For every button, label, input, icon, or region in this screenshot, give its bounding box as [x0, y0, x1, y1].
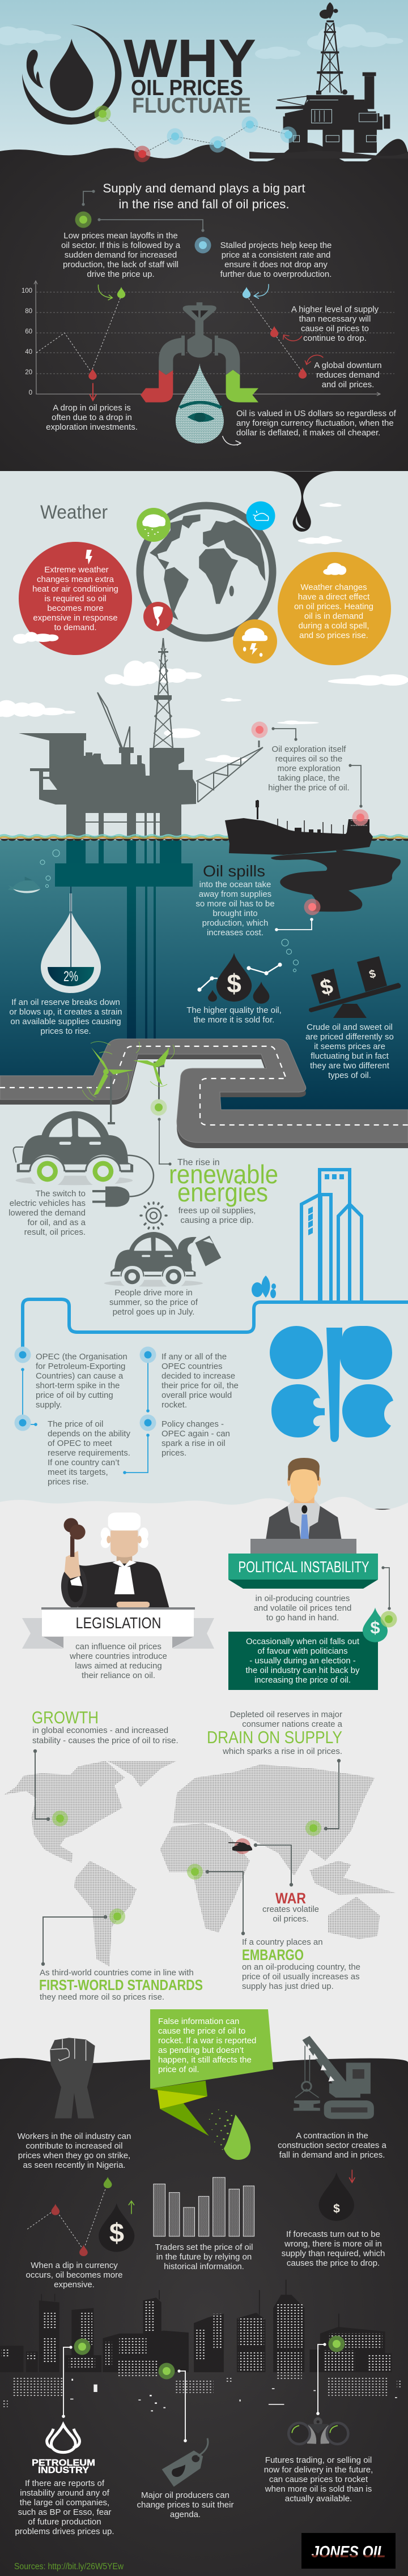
platform cut-outs — [43, 772, 160, 836]
text: OPEC 3: prices rise. — [48, 1477, 89, 1487]
scale with barrels — [309, 956, 401, 1018]
text: forecasts: If forecasts turn out to be — [286, 2230, 380, 2239]
text: petroleum: such as BP or Esso, fear — [18, 2507, 111, 2517]
callout: false information: price of oil. — [158, 2065, 199, 2074]
text: OPEC 1: OPEC (the Organisation — [36, 1352, 128, 1362]
heading: drain on supply — [207, 1710, 343, 1756]
heading: drain on supply: consumer nations create a — [242, 1719, 343, 1729]
text: reserve: on available supplies causing — [10, 1017, 121, 1026]
hatched bar chart — [154, 2177, 254, 2236]
bubbles — [40, 850, 298, 972]
icon: petroleum drops — [47, 2425, 80, 2453]
text: OPEC 2: their price for oil, the — [162, 1381, 239, 1390]
underwater pillars — [55, 840, 193, 1042]
marker: tanker — [352, 810, 368, 825]
chart: axes and grid: 80 — [25, 308, 32, 315]
text: first-world standards: As third-world countries come in line with — [40, 1968, 194, 1978]
reserve drop 2% — [41, 887, 101, 993]
quality oil drops with dollar: $ — [227, 969, 241, 998]
panel: politicians — [228, 1632, 378, 1690]
chart: axes and grid — [22, 281, 394, 396]
text: first-world standards — [39, 1968, 203, 2002]
text: oil spills: increases cost. — [207, 928, 264, 938]
chart: axes and grid: 20 — [25, 369, 32, 376]
marker and connector: futures — [316, 2336, 345, 2415]
weather icon: tornado — [143, 602, 173, 631]
chart: axes and grid: 60 — [25, 328, 32, 335]
chart: drops — [88, 287, 307, 380]
podium — [250, 1539, 356, 1554]
text: construction: construction sector creates a — [278, 2141, 387, 2150]
heading: renewable energies: causing a price dip. — [180, 1216, 254, 1225]
text: oil spills: so more oil has to be — [196, 899, 275, 909]
chart: axes and grid: 100 — [22, 288, 32, 294]
callout: false information: happen, it still affects the — [158, 2055, 252, 2065]
text: low prices: Low prices mean layoffs in the — [63, 231, 178, 241]
text: crude and sweet: Crude oil and sweet oil — [307, 1022, 393, 1032]
text: futures: now for delivery in the future, — [264, 2465, 373, 2475]
text: legislation: their reliance on oil. — [82, 1671, 155, 1680]
connector: political — [381, 1566, 391, 1610]
panel: politicians: the oil industry can hit back by — [246, 1666, 360, 1675]
text: higher supply: A higher level of supply — [291, 305, 379, 314]
text: traders: historical information. — [164, 2262, 244, 2271]
text: global downturn: A global downturn — [314, 361, 382, 370]
text: reserve: or blows up, it creates a strain — [9, 1007, 122, 1017]
text: currency: occurs, oil becomes more — [26, 2270, 122, 2280]
panel: extreme weather: heat or air conditioning — [32, 584, 118, 594]
text: OPEC 2: overall price would — [162, 1390, 232, 1400]
icon: price tag — [162, 2438, 208, 2487]
fish — [8, 876, 40, 893]
text: exploration: requires oil so the — [275, 754, 342, 764]
clouds in sky — [0, 24, 403, 59]
text: higher quality: The higher quality the oil, — [186, 1005, 282, 1015]
text: OPEC 4: Policy changes - — [162, 1419, 224, 1429]
connector: exploration — [271, 727, 363, 808]
text: war — [262, 1890, 319, 1924]
text: low prices: production, the lack of staff will — [63, 260, 178, 269]
heading: weather: Weather — [40, 502, 108, 523]
text: workers: Workers in the oil industry can — [18, 2132, 131, 2141]
text: OPEC 1: short-term spike in the — [36, 1381, 120, 1390]
clouds white in weather — [298, 503, 342, 544]
text: workers: contribute to increased oil — [26, 2141, 122, 2151]
text: electric vehicles: The switch to — [36, 1189, 86, 1199]
callout: false information: as pending but doesn’t — [158, 2046, 244, 2055]
text: OPEC 1: for Petroleum-Exporting — [36, 1362, 125, 1371]
panel: extreme weather: is required so oil — [44, 594, 107, 604]
chart: axes and grid: 40 — [25, 349, 32, 356]
text: electric vehicles: for oil, and as a — [27, 1218, 86, 1227]
logo: jones oil — [301, 2533, 396, 2569]
OPEC markers and links — [15, 1346, 156, 1474]
chart: curved arrows — [90, 284, 323, 446]
panel: weather changes — [278, 552, 391, 665]
quality oil drops with dollar — [197, 953, 282, 1004]
ribbon: legislation — [22, 1607, 214, 1649]
connector: renewable — [158, 1118, 172, 1166]
text: OPEC 3: The price of oil — [48, 1419, 103, 1429]
panel: weather changes: have a direct effect — [298, 592, 370, 602]
dollar sign: forecast: $ — [333, 2202, 340, 2215]
logo: jones oil: JONES OIL — [312, 2543, 385, 2561]
sea surface wave — [0, 834, 408, 842]
text: war: creates volatile — [262, 1905, 319, 1914]
heading: renewable energies — [169, 1158, 278, 1225]
text: currency: expensive. — [54, 2280, 95, 2290]
weather icon: snow cloud — [137, 508, 171, 542]
marker: spill — [304, 899, 321, 915]
text: oil producing: and volatile oil prices tend — [254, 1603, 351, 1613]
panel: extreme weather: Extreme weather — [44, 565, 109, 575]
text: oil spills: brought into — [212, 909, 258, 918]
text: OPEC 3: If one country can’t — [48, 1458, 120, 1467]
text: embargo: EMBARGO — [242, 1946, 304, 1963]
heading: petroleum industry — [32, 2458, 95, 2475]
text: exploration: higher the price of oil. — [268, 783, 350, 793]
city skyline — [0, 2280, 392, 2372]
reserve drop 2%: 2% — [63, 969, 78, 985]
text: drop in oil prices: often due to a drop in — [52, 413, 132, 422]
text: crude and sweet: fluctuating but in fact — [311, 1051, 389, 1061]
oil spill — [271, 849, 401, 912]
scale with barrels: $ — [318, 974, 335, 1000]
text: higher supply: cause oil prices to — [301, 324, 369, 333]
text: exploration: more exploration — [277, 764, 341, 773]
text: oil valued in dollars: any foreign currency fluctuation, when the — [236, 418, 394, 428]
text: electric vehicles: lowered the demand — [8, 1208, 86, 1218]
logo: oil drop in crescent — [22, 24, 121, 125]
currency dip chart — [27, 2177, 134, 2256]
heading: growth: GROWTH — [32, 1708, 99, 1727]
icon: binoculars — [288, 2417, 348, 2444]
text: oil spills: away from supplies — [199, 889, 271, 899]
text: construction: A contraction in the — [296, 2131, 368, 2141]
oil tanker — [225, 800, 373, 855]
text: higher supply: than necessary will — [299, 314, 371, 324]
text: legislation: can influence oil prices — [75, 1642, 162, 1651]
heading: renewable energies: The rise in — [177, 1158, 220, 1167]
callout: false information: cause the price of oil to — [158, 2026, 245, 2036]
city lights fading — [3, 2372, 402, 2407]
dollar sign: currency: $ — [109, 2218, 124, 2248]
ribbon: legislation: LEGISLATION — [76, 1614, 161, 1632]
callout: false information: False information can — [158, 2017, 239, 2026]
heading: renewable energies: frees up oil supplies, — [178, 1206, 256, 1216]
text: exploration: taking place, the — [278, 773, 340, 783]
text: higher quality: the more it is sold for. — [194, 1015, 274, 1025]
panel: politicians: increasing the price of oil. — [254, 1675, 351, 1685]
text: low prices: drive the price up. — [87, 269, 155, 279]
text: crude and sweet: types of oil. — [328, 1071, 371, 1080]
dollar drop with eye — [176, 363, 224, 443]
background: light section — [0, 467, 408, 1509]
text: petroleum: the large oil companies, — [20, 2498, 109, 2507]
text: currency: When a dip in currency — [31, 2261, 118, 2270]
oil platform — [19, 638, 263, 838]
text: petroleum: If there are reports of — [25, 2479, 105, 2488]
panel: extreme weather: becomes more — [47, 604, 104, 613]
text: electric vehicles: electric vehicles has — [10, 1199, 86, 1208]
text: low prices: sudden demand for increased — [65, 250, 177, 260]
heading: petroleum industry: INDUSTRY — [38, 2466, 89, 2475]
heading: drain on supply: DRAIN ON SUPPLY — [207, 1727, 342, 1747]
chart: axes and grid: 0 — [29, 390, 32, 396]
heading: growth: in global economies - and increased — [32, 1726, 168, 1735]
text: war: oil prices. — [273, 1914, 309, 1924]
text: embargo: on an oil-producing country, the — [242, 1962, 360, 1972]
text: drop in oil prices: exploration investments. — [46, 422, 138, 432]
forecast drop — [319, 2170, 355, 2221]
text: crude and sweet: are priced differently so — [305, 1032, 394, 1042]
marker and connector: petroleum — [62, 2338, 91, 2418]
car with petrol can — [104, 1232, 221, 1289]
background: water — [0, 840, 408, 1115]
clouds around rig — [0, 661, 408, 763]
heading: petroleum industry: PETROLEUM — [32, 2458, 95, 2468]
icon: tank — [228, 1842, 252, 1851]
text: oil valued in dollars: dollar is deflated, it makes oil cheaper. — [236, 428, 380, 438]
heading: oil spills: Oil spills — [203, 862, 265, 880]
text: low prices: oil sector. If this is followed by a — [61, 241, 181, 250]
panel: weather changes: during a cold spell, — [298, 621, 369, 631]
title: OIL PRICES — [131, 76, 243, 100]
city outline blue — [23, 1170, 408, 1355]
panel: extreme weather — [19, 542, 132, 655]
heading: growth — [32, 1708, 178, 1745]
text: electric vehicles: result, oil prices. — [24, 1227, 86, 1237]
text: OPEC 1: Countries) can cause a — [36, 1371, 124, 1381]
background: grey section — [0, 1497, 408, 2095]
text: major producers: change prices to suit their — [137, 2500, 233, 2510]
city scattered lights — [70, 2379, 397, 2411]
text: OPEC 2: decided to increase — [162, 1371, 235, 1381]
marker: renewable — [151, 1099, 167, 1115]
text: OPEC 2: rocket. — [162, 1400, 187, 1410]
politician — [266, 1458, 341, 1539]
text: major producers: Major oil producers can — [141, 2491, 230, 2500]
panel: extreme weather: changes mean extra — [37, 575, 114, 584]
text: OPEC 2: OPEC countries — [162, 1362, 223, 1371]
text: forecasts: wrong, there is more oil in — [284, 2239, 382, 2249]
panel: politicians: - usually during an election - — [249, 1656, 356, 1666]
text: war: WAR — [275, 1890, 306, 1907]
dotted world map — [4, 1761, 396, 1966]
sources: Sources: http://bit.ly/26W5YEw — [14, 2562, 124, 2571]
marker: green intro — [75, 212, 92, 228]
text: petroleum: instability around any of — [20, 2488, 110, 2498]
text: workers: prices when they go on strike, — [18, 2151, 130, 2160]
map markers — [52, 1811, 321, 1924]
panel: politicians: of favour with politicians — [257, 1646, 348, 1656]
text: OPEC 3: meet its targets, — [48, 1467, 108, 1477]
marker: blue intro — [195, 237, 211, 254]
callout: false information: rocket. If a war is reported — [158, 2036, 256, 2046]
text: OPEC 2: If any or all of the — [162, 1352, 227, 1362]
text: first-world standards: FIRST-WORLD STANDARDS — [39, 1976, 203, 1993]
wave over rig legs — [249, 151, 408, 159]
text: people drive: summer, so the price of — [109, 1298, 198, 1307]
scale with barrels: $ — [368, 968, 377, 981]
wind turbines — [82, 1042, 175, 1124]
heading: drain on supply: which sparks a rise in oil prices. — [222, 1747, 342, 1756]
map connectors — [33, 1749, 341, 1966]
weather icon: storm cloud — [233, 619, 277, 664]
intro text: in the rise and fall of oil prices. — [118, 197, 290, 211]
text: people drive: People drive more in — [114, 1288, 193, 1298]
text: workers: as seen recently in Nigeria. — [23, 2160, 125, 2170]
text: legislation: where countries introduce — [69, 1651, 167, 1661]
banner: political instability — [228, 1554, 378, 1589]
text: legislation: laws aimed at reducing — [75, 1661, 162, 1671]
text: futures: actually available. — [285, 2494, 352, 2504]
icon: green dissolving capsule — [209, 2109, 250, 2160]
text: embargo: price of oil usually increases as — [242, 1972, 360, 1982]
heading: renewable energies: energies — [177, 1178, 268, 1207]
background: upper dark section — [0, 139, 408, 471]
pipe and valve — [141, 302, 258, 403]
road — [0, 1039, 408, 1148]
title: WHY — [124, 28, 256, 89]
text: major producers: agenda. — [170, 2510, 201, 2519]
heading: renewable energies: renewable — [169, 1159, 278, 1189]
text: OPEC 1: supply. — [36, 1400, 62, 1410]
text: global downturn: reduces demand — [316, 370, 380, 380]
OPEC logo — [270, 1326, 393, 1442]
icon: crane — [294, 2036, 374, 2119]
text: oil producing: in oil-producing countries — [256, 1594, 350, 1603]
text: oil producing: to go hand in hand. — [266, 1613, 339, 1623]
text: stalled projects: ensure it does not drop any — [224, 260, 328, 269]
text: traders: Traders set the price of oil — [155, 2243, 253, 2252]
text: futures: Futures trading, or selling oil — [265, 2455, 372, 2465]
panel: weather changes: and so prices rise. — [299, 631, 368, 640]
text: stalled projects: Stalled projects help keep the — [220, 241, 332, 250]
text: global downturn: and oil prices. — [322, 380, 374, 390]
title: FLUCTUATE — [132, 94, 251, 118]
text: OPEC 3: depends on the ability — [48, 1429, 130, 1439]
icon: sun — [141, 1203, 167, 1229]
text: OPEC 4: spark a rise in oil — [162, 1439, 226, 1448]
text: people drive: petrol goes up in July. — [113, 1307, 194, 1317]
callout: false information — [150, 2009, 273, 2136]
heading: growth: stability - causes the price of oil to rise. — [32, 1736, 178, 1745]
text: OPEC 1: price of oil by cutting — [36, 1390, 113, 1400]
text: petroleum: of future production — [28, 2517, 101, 2527]
dollar drop and marker — [363, 1608, 397, 1642]
text: crude and sweet: it seems prices are — [314, 1042, 385, 1051]
panel: weather changes: Weather changes — [300, 583, 367, 592]
heading: drain on supply: Depleted oil reserves in major — [230, 1710, 342, 1719]
text: embargo: If a country places an — [242, 1937, 323, 1947]
text: OPEC 4: prices. — [162, 1448, 186, 1458]
text: drop in oil prices: A drop in oil prices is — [53, 403, 131, 413]
text: OPEC 4: OPEC again - can — [162, 1429, 230, 1439]
text: crude and sweet: they are two different — [310, 1061, 390, 1071]
marker: exploration — [252, 721, 267, 738]
background: sky — [0, 0, 408, 161]
text: oil spills: production, which — [202, 918, 268, 928]
background: lower dark section — [0, 2058, 408, 2576]
marker and connector: producers — [159, 2363, 187, 2442]
text: reserve: prices to rise. — [40, 1026, 91, 1036]
panel: politicians: Occasionally when oil falls out — [246, 1637, 360, 1646]
panel: extreme weather: to demand. — [54, 623, 97, 632]
cloud over red panel — [13, 632, 58, 644]
intro text: Supply and demand plays a big part — [103, 181, 305, 195]
weather icon: sun cloud — [246, 502, 275, 530]
text: traders: in the future by relying on — [156, 2252, 252, 2262]
text: OPEC 3: reserve requirements. — [48, 1448, 130, 1458]
oil rig top — [276, 2, 390, 155]
text: exploration: Oil exploration itself — [272, 744, 346, 754]
icon: blue splash — [252, 1276, 276, 1298]
judge — [61, 1513, 169, 1608]
intro connectors — [82, 190, 205, 232]
icon: fist — [50, 2038, 95, 2119]
price chain markers — [94, 105, 297, 162]
text: stalled projects: further due to overproduction. — [220, 269, 332, 279]
text: oil spills: into the ocean take — [199, 880, 271, 889]
text: construction: fall in demand and in prices. — [279, 2150, 385, 2160]
dollar drop and marker: $ — [370, 1618, 380, 1637]
text: oil valued in dollars: Oil is valued in US dollars so regardless of — [236, 409, 397, 418]
road inner light area — [116, 1056, 269, 1132]
oil drip — [271, 471, 335, 532]
text: petroleum: problems drives prices up. — [15, 2527, 114, 2536]
panel: extreme weather: expensive in response — [33, 613, 118, 623]
text: forecasts: supply than required, which — [282, 2249, 385, 2258]
title — [124, 28, 256, 118]
text: embargo — [242, 1937, 360, 1991]
globe — [140, 506, 273, 638]
text: forecasts: causes the price to drop. — [287, 2258, 380, 2268]
text: OPEC 3: of OPEC to meet — [48, 1439, 112, 1448]
text: embargo: supply has just dried up. — [242, 1982, 334, 1991]
panel: weather changes: on oil prices. Heating — [294, 602, 373, 611]
text: stalled projects: price at a consistent rate and — [222, 250, 330, 260]
text: futures: when more oil is sold than is — [265, 2484, 372, 2494]
text: reserve: If an oil reserve breaks down — [11, 998, 120, 1007]
panel: weather changes: oil is in demand — [304, 611, 363, 621]
connector: spill — [275, 918, 313, 931]
text: higher supply: continue to drop. — [303, 333, 367, 343]
text: futures: can cause prices to rocket — [269, 2475, 368, 2484]
text: first-world standards: they need more oil so prices rise. — [40, 1992, 164, 2002]
electric car — [13, 1111, 154, 1207]
